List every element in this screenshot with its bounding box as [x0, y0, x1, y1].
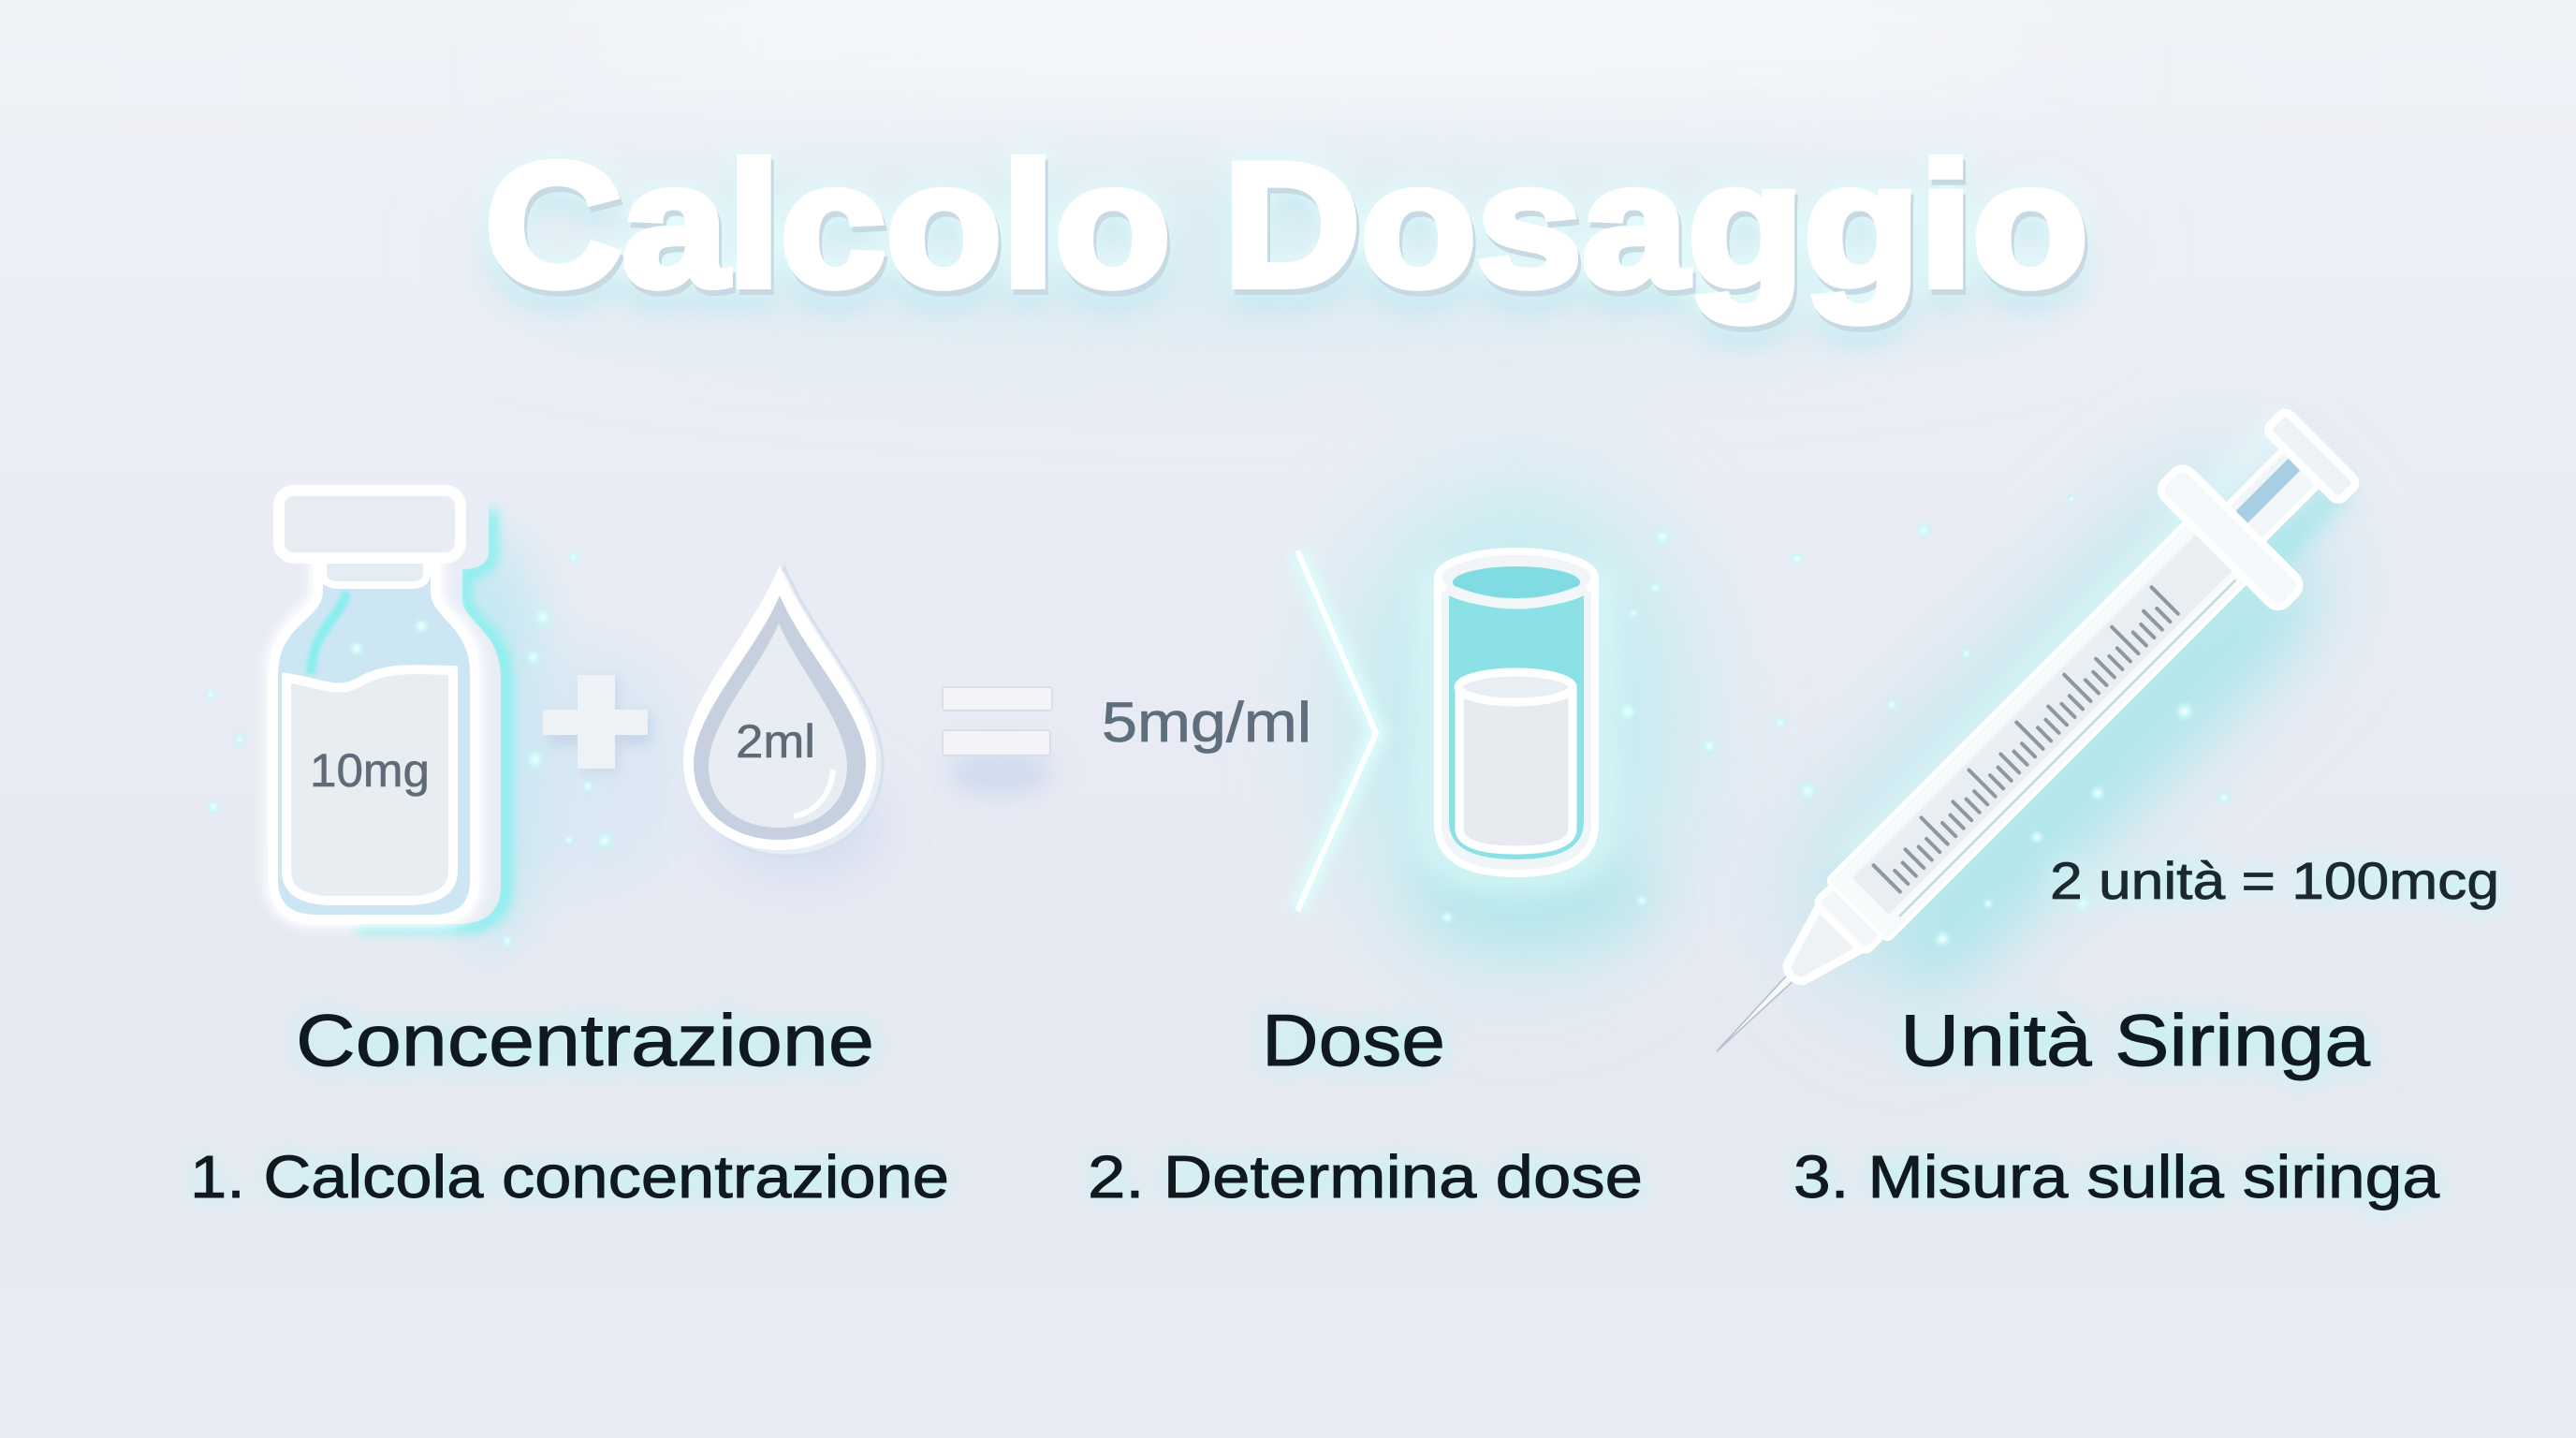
nozzle: [1770, 907, 1861, 998]
icon: syringe with scale: [1656, 386, 2382, 1112]
title: Calcolo Dosaggio: [485, 126, 2088, 323]
syringe measure label: 2 unità = 100mcg: [2050, 851, 2499, 910]
label: 2ml: 2ml: [736, 715, 815, 768]
icon: dose beaker: [1432, 551, 1601, 880]
heading: Concentrazione: Concentrazione: [296, 999, 874, 1081]
sparkle particles: [203, 493, 2233, 949]
plunger rod: [2213, 440, 2328, 555]
title: Calcolo Dosaggio: [485, 126, 2088, 323]
icon: vial 10mg: [273, 491, 505, 927]
heading: Dose: Dose: [1262, 999, 1445, 1081]
step 1 text: 1. Calcola concentrazione: [190, 1143, 949, 1211]
ambient glows behind icons: [435, 0, 2351, 1023]
step 1 text: 1. Calcola concentrazione: [190, 1143, 949, 1211]
step 2 text: 2. Determina dose: [1088, 1143, 1643, 1211]
thumb flange: [2265, 410, 2358, 503]
scale ticks: [1874, 587, 2178, 892]
title: Calcolo Dosaggio: [488, 132, 2091, 329]
syringe measure label: 2 unità = 100mcg: [2050, 851, 2499, 910]
barrel: [1826, 511, 2257, 942]
icon: plus: [543, 675, 652, 773]
arrow: chevron: [1297, 550, 1376, 911]
step 3 text: 3. Misura sulla siringa: [1793, 1143, 2439, 1211]
heading: Concentrazione: Concentrazione: [296, 999, 874, 1081]
icon: water drop 2ml: [683, 565, 883, 856]
step 3 text: 3. Misura sulla siringa: [1793, 1143, 2439, 1211]
needle: [1713, 967, 1801, 1055]
collar: [1815, 885, 1883, 953]
heading: Dose: Dose: [1262, 999, 1445, 1081]
barrel flange: [2157, 463, 2305, 611]
icon: equals sign: [943, 687, 1052, 756]
label: 10mg: 10mg: [310, 744, 430, 797]
title: Calcolo Dosaggio: [485, 142, 2088, 339]
concentration value: 5mg/ml: [1102, 691, 1311, 754]
heading: Unità Siringa: Unità Siringa: [1900, 999, 2371, 1081]
step 2 text: 2. Determina dose: [1088, 1143, 1643, 1211]
heading: Unità Siringa: Unità Siringa: [1900, 999, 2371, 1081]
